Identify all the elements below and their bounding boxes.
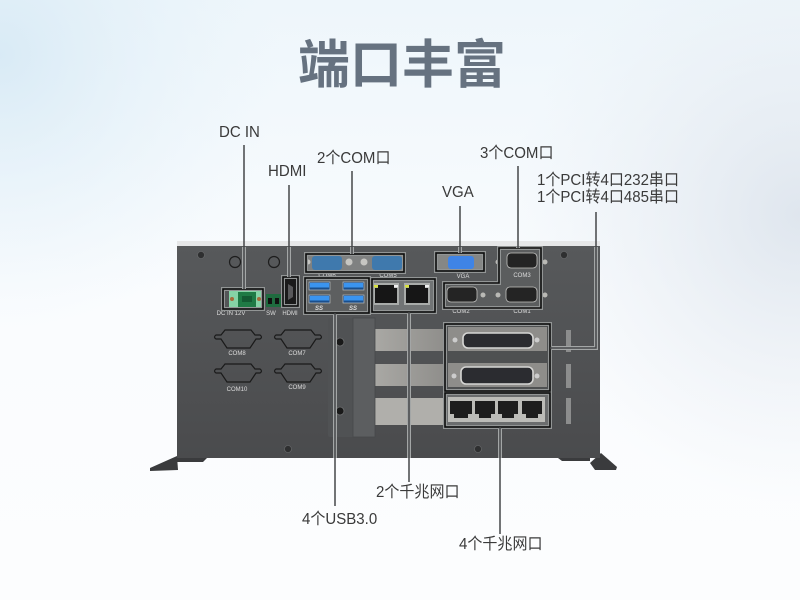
PCI slot bands	[375, 329, 445, 425]
antenna holes	[230, 256, 280, 268]
silkscreen labels	[217, 273, 531, 393]
silkscreen labels: COM5	[379, 273, 397, 279]
chassis	[177, 246, 600, 458]
bracket	[328, 318, 375, 437]
silkscreen labels: COM9	[288, 385, 306, 391]
HDMI port	[285, 279, 296, 304]
silkscreen labels: COM6	[318, 273, 336, 279]
bracket screws	[336, 338, 344, 415]
dual LAN ports	[372, 279, 435, 312]
DC IN connector	[229, 291, 262, 308]
USB 3.0 ports	[305, 278, 369, 313]
silkscreen labels: HDMI	[282, 311, 298, 317]
top silver edge	[177, 241, 600, 247]
label: PCI 485: 1个PCI转4口485串口	[537, 188, 679, 206]
silkscreen labels: COM7	[288, 351, 306, 357]
USB 3.0 ports: SS	[349, 306, 357, 312]
label: 4 USB: 4个USB3.0	[302, 510, 378, 528]
highlight boxes	[223, 248, 550, 427]
right side latches	[566, 330, 571, 424]
title: 端口丰富	[298, 37, 506, 95]
blank COM knockouts	[214, 330, 322, 382]
DB44 connectors	[445, 324, 550, 391]
VGA port	[436, 253, 484, 271]
silkscreen labels: COM8	[228, 351, 246, 357]
USB 3.0 ports: SS	[315, 306, 323, 312]
silkscreen labels: COM1	[513, 309, 531, 315]
label: VGA: VGA	[442, 184, 474, 201]
COM1 COM2 COM3 ports	[444, 248, 548, 308]
silkscreen labels: VGA	[457, 274, 469, 280]
silkscreen labels: COM10	[227, 387, 248, 393]
silkscreen labels: COM3	[513, 273, 531, 279]
silkscreen labels: COM2	[452, 309, 470, 315]
mounting feet	[150, 453, 617, 471]
label: DC IN: DC IN	[219, 124, 260, 141]
leader lines	[244, 145, 596, 534]
device: rear panel	[150, 241, 617, 471]
label: 2 COM: 2个COM口	[317, 149, 390, 167]
silkscreen labels: SW	[266, 311, 276, 317]
COM6 and COM5 ports	[306, 254, 404, 272]
silkscreen labels: DC IN 12V	[217, 311, 245, 317]
label: 4 LAN: 4个千兆网口	[459, 535, 543, 553]
chassis screws	[198, 252, 568, 452]
label: 2 LAN: 2个千兆网口	[376, 483, 460, 501]
label: 3 COM: 3个COM口	[480, 144, 553, 162]
quad LAN ports	[445, 393, 550, 427]
label: HDMI: HDMI	[268, 163, 306, 180]
label: PCI 232: 1个PCI转4口232串口	[537, 171, 679, 189]
SW connector	[266, 294, 281, 307]
